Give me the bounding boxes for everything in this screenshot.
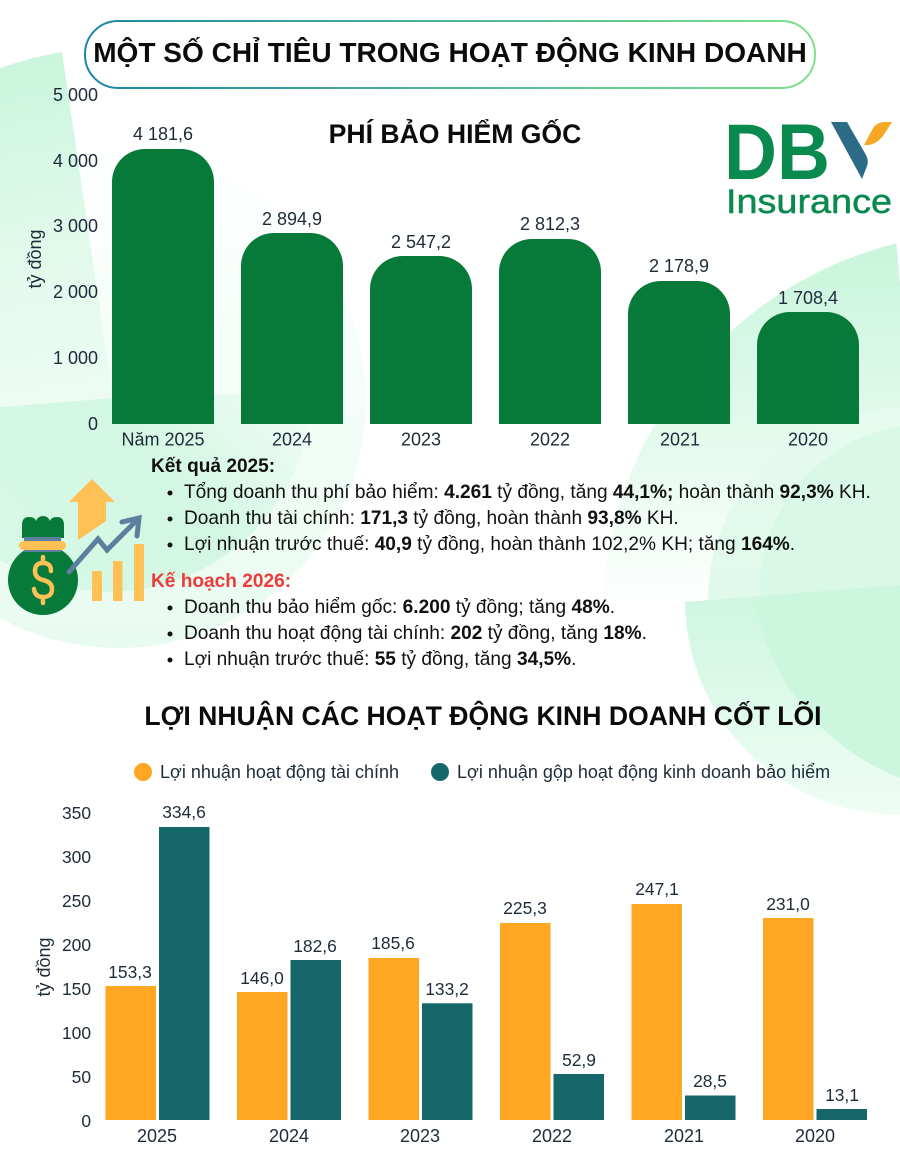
text block: kế hoạch 2026: Lợi nhuận trước thuế: 55 tỷ đồng, tăng 34,5%.	[184, 649, 576, 670]
value labels: 247,1	[635, 879, 679, 899]
title	[85, 21, 815, 88]
y axis labels: 150	[62, 979, 91, 999]
legend: Lợi nhuận hoạt động tài chính	[160, 762, 399, 782]
x axis labels: 2023	[400, 1126, 440, 1146]
y axis title: tỷ đồng	[25, 229, 45, 289]
value labels: 2 547,2	[391, 232, 451, 252]
text block: kế hoạch 2026: Doanh thu bảo hiểm gốc: 6.200 tỷ đồng; tăng 48%.	[184, 597, 615, 618]
value labels: 231,0	[766, 894, 810, 914]
chart: phí bảo hiểm gốc bars	[25, 85, 859, 450]
chart: lợi nhuận grouped bars	[34, 802, 867, 1146]
y axis labels: 350	[62, 803, 91, 823]
x axis labels	[137, 1126, 835, 1146]
value labels: 133,2	[425, 979, 469, 999]
y axis labels: 300	[62, 847, 91, 867]
x axis labels: 2025	[137, 1126, 177, 1146]
x axis labels: 2020	[795, 1126, 835, 1146]
bars	[112, 149, 859, 424]
heading: phí bảo hiểm gốc: PHÍ BẢO HIỂM GỐC	[329, 119, 581, 149]
y axis labels: 200	[62, 935, 91, 955]
text block: kết quả 2025: Tổng doanh thu phí bảo hiểm: 4.261 tỷ đồng, tăng 44,1%; hoàn thành 92,3% KH.	[184, 482, 871, 503]
value labels: 2 178,9	[649, 256, 709, 276]
value labels: 2 812,3	[520, 214, 580, 234]
value labels: 1 708,4	[778, 288, 838, 308]
value labels: 334,6	[162, 802, 206, 822]
logo: DBV Insurance: DB	[724, 107, 830, 196]
text block: kết quả 2025: Doanh thu tài chính: 171,3 tỷ đồng, hoàn thành 93,8% KH.	[184, 508, 679, 529]
legend	[134, 762, 830, 782]
x axis labels: 2021	[660, 430, 700, 450]
logo: DBV Insurance: Insurance	[726, 183, 892, 221]
text block: kế hoạch 2026	[151, 571, 647, 670]
value labels: 225,3	[503, 898, 547, 918]
y axis labels: 2 000	[53, 282, 98, 302]
y axis labels: 0	[88, 414, 98, 434]
text block: kết quả 2025: Kết quả 2025:	[151, 456, 275, 477]
value labels	[108, 802, 859, 1105]
x axis labels: 2021	[664, 1126, 704, 1146]
x axis labels: 2020	[788, 430, 828, 450]
y axis labels: 50	[72, 1067, 91, 1087]
x axis labels: 2023	[401, 430, 441, 450]
text block: kết quả 2025	[151, 456, 871, 555]
y axis labels: 1 000	[53, 348, 98, 368]
y axis labels	[53, 85, 98, 434]
x axis labels: 2024	[272, 430, 312, 450]
y axis labels: 3 000	[53, 216, 98, 236]
value labels: 153,3	[108, 962, 152, 982]
y axis labels	[62, 803, 91, 1131]
teal bars	[159, 827, 867, 1120]
y axis labels: 0	[81, 1111, 91, 1131]
value labels: 4 181,6	[133, 124, 193, 144]
value labels: 185,6	[371, 933, 415, 953]
value labels: 182,6	[293, 936, 337, 956]
text block: kết quả 2025: Lợi nhuận trước thuế: 40,9 tỷ đồng, hoàn thành 102,2% KH; tăng 164%.	[184, 534, 795, 555]
text block: kế hoạch 2026: Kế hoạch 2026:	[151, 571, 291, 592]
value labels: 146,0	[240, 968, 284, 988]
y axis labels: 5 000	[53, 85, 98, 105]
x axis labels: 2022	[530, 430, 570, 450]
text block: kế hoạch 2026: Doanh thu hoạt động tài chính: 202 tỷ đồng, tăng 18%.	[184, 623, 647, 644]
x axis labels: Năm 2025	[121, 430, 205, 450]
icon: money bag with growth chart	[8, 479, 144, 615]
legend: Lợi nhuận gộp hoạt động kinh doanh bảo hiểm	[457, 762, 830, 782]
logo: DBV Insurance	[724, 107, 892, 221]
value labels: 28,5	[693, 1071, 727, 1091]
x axis labels	[121, 430, 828, 450]
background: decorative mint fans	[0, 52, 900, 815]
y axis labels: 250	[62, 891, 91, 911]
y axis labels: 100	[62, 1023, 91, 1043]
title: MỘT SỐ CHỈ TIÊU TRONG HOẠT ĐỘNG KINH DOANH	[93, 36, 807, 68]
x axis labels: 2024	[269, 1126, 309, 1146]
y axis title: tỷ đồng	[34, 937, 54, 997]
value labels: 52,9	[562, 1050, 596, 1070]
orange bars	[106, 904, 814, 1120]
value labels: 2 894,9	[262, 209, 322, 229]
heading: lợi nhuận các hoạt động: LỢI NHUẬN CÁC HOẠT ĐỘNG KINH DOANH CỐT LÕI	[144, 701, 822, 731]
value labels	[133, 124, 838, 308]
value labels: 13,1	[825, 1085, 859, 1105]
x axis labels: 2022	[532, 1126, 572, 1146]
y axis labels: 4 000	[53, 151, 98, 171]
